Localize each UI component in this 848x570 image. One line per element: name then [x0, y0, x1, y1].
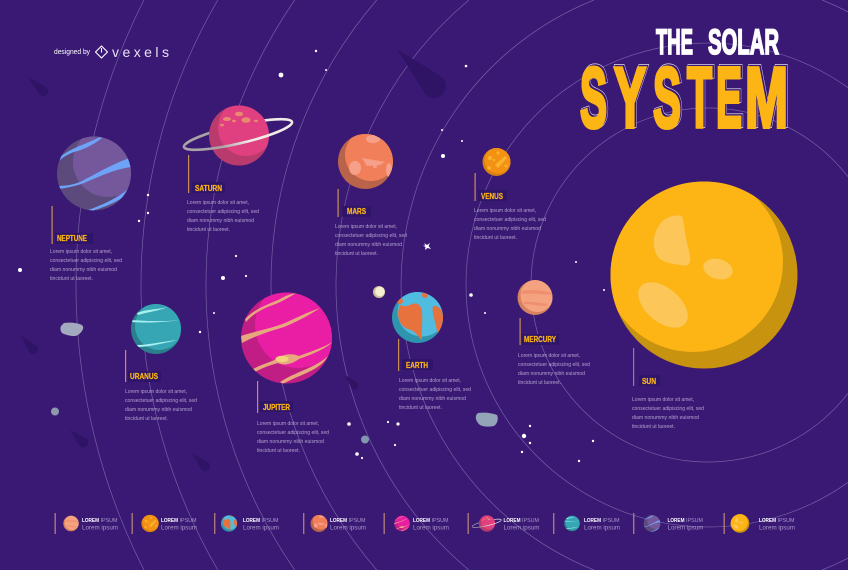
title: M — [746, 50, 790, 144]
planet: uranus — [131, 302, 183, 354]
sun text: Lorem ipsum dolor sit amet, — [632, 397, 694, 403]
legend item: venus: Lorem ipsum — [161, 524, 197, 532]
legend item: earth — [214, 513, 279, 534]
mercury text: consectetuer adipiscing elit, sed — [518, 362, 590, 368]
mars label — [338, 189, 371, 217]
uranus text: consectetuer adipiscing elit, sed — [125, 398, 197, 404]
mars text: diam nonummy nibh euismod — [335, 242, 402, 248]
saturn text: diam nonummy nibh euismod — [187, 218, 254, 224]
title: S — [582, 50, 608, 144]
uranus label — [125, 350, 161, 382]
logo: designed by vexels — [54, 44, 169, 60]
legend item: sun: IPSUM — [778, 518, 795, 524]
jupiter label — [257, 381, 293, 413]
venus text: consectetuer adipiscing elit, sed — [474, 217, 546, 223]
neptune label — [52, 206, 93, 244]
logo: designed by vexels: designed by — [54, 49, 90, 56]
title: M — [746, 50, 790, 144]
moon — [373, 286, 385, 298]
title: S — [582, 50, 608, 144]
jupiter text: diam nonummy nibh euismod — [257, 439, 324, 445]
planet: sun — [603, 172, 798, 368]
neptune text: consectetuer adipiscing elit, sed — [50, 258, 122, 264]
legend item: earth: IPSUM — [262, 518, 279, 524]
comets — [21, 49, 446, 471]
title: THE — [656, 23, 693, 62]
title: Y — [616, 50, 648, 144]
neptune text: diam nonummy nibh euismod — [50, 267, 117, 273]
legend item: mars: IPSUM — [348, 518, 366, 524]
legend item: mercury — [54, 513, 118, 534]
legend item: uranus: LOREM — [584, 518, 601, 524]
legend item: jupiter: Lorem ipsum — [413, 524, 449, 532]
legend item: earth: Lorem ipsum — [243, 524, 279, 532]
mars text: Lorem ipsum dolor sit amet, — [335, 224, 397, 230]
legend item: mercury: IPSUM — [100, 518, 118, 524]
uranus text: diam nonummy nibh euismod — [125, 407, 192, 413]
planet: mars — [338, 129, 397, 189]
planet: earth — [392, 288, 446, 343]
jupiter text: tincidunt ut laoreet. — [257, 448, 300, 454]
earth text: tincidunt ut laoreet. — [399, 405, 442, 411]
neptune label: NEPTUNE — [57, 234, 88, 243]
sun text: consectetuer adipiscing elit, sed — [632, 406, 704, 412]
title: S — [654, 50, 682, 144]
sun label — [633, 348, 660, 386]
legend item: venus: LOREM — [161, 518, 178, 524]
legend item: jupiter — [384, 513, 449, 534]
legend item: neptune: LOREM — [668, 518, 685, 524]
jupiter text — [257, 421, 329, 454]
legend item: saturn — [468, 513, 540, 534]
legend item: neptune: IPSUM — [686, 518, 703, 524]
mercury text: tincidunt ut laoreet. — [518, 380, 561, 386]
title: T — [688, 50, 714, 144]
earth text — [399, 378, 471, 411]
neptune text — [50, 249, 122, 282]
title: Y — [616, 50, 648, 144]
legend item: sun: Lorem ipsum — [759, 524, 795, 532]
uranus label: URANUS — [130, 372, 159, 381]
legend item: neptune: Lorem ipsum — [668, 524, 704, 532]
legend item: sun: LOREM — [759, 518, 776, 524]
uranus text — [125, 389, 197, 422]
venus text: tincidunt ut laoreet. — [474, 235, 517, 241]
venus label: VENUS — [481, 192, 504, 201]
jupiter label: JUPITER — [263, 403, 290, 412]
legend item: saturn: Lorem ipsum — [504, 524, 540, 532]
saturn label — [188, 155, 225, 193]
venus text: diam nonummy nibh euismod — [474, 226, 541, 232]
legend item: mercury: LOREM — [82, 518, 99, 524]
venus text: Lorem ipsum dolor sit amet, — [474, 208, 536, 214]
mars text: consectetuer adipiscing elit, sed — [335, 233, 407, 239]
earth text: Lorem ipsum dolor sit amet, — [399, 378, 461, 384]
planet: mercury — [518, 279, 554, 315]
title: Y — [614, 51, 646, 146]
planet: saturn — [184, 100, 292, 166]
title: E — [718, 50, 744, 144]
mercury label — [520, 318, 559, 345]
legend item: uranus: IPSUM — [602, 518, 620, 524]
neptune text: Lorem ipsum dolor sit amet, — [50, 249, 112, 255]
sun text: tincidunt ut laoreet. — [632, 424, 675, 430]
saturn text: Lorem ipsum dolor sit amet, — [187, 200, 249, 206]
jupiter text: Lorem ipsum dolor sit amet, — [257, 421, 319, 427]
legend item: uranus: Lorem ipsum — [584, 524, 620, 532]
sun text: diam nonummy nibh euismod — [632, 415, 699, 421]
legend item: sun — [724, 513, 795, 534]
legend item: mars: Lorem ipsum — [330, 524, 366, 532]
legend: bottom row — [54, 513, 795, 534]
earth text: diam nonummy nibh euismod — [399, 396, 466, 402]
legend item: mercury: Lorem ipsum — [82, 524, 118, 532]
saturn text — [187, 200, 259, 233]
mars label: MARS — [347, 207, 367, 216]
planet: venus — [482, 146, 512, 176]
earth label — [398, 339, 433, 371]
planet: neptune — [57, 127, 143, 211]
saturn text: consectetuer adipiscing elit, sed — [187, 209, 259, 215]
planet: jupiter — [241, 282, 341, 384]
sun text — [632, 397, 704, 430]
saturn label: SATURN — [195, 184, 222, 193]
title: T — [688, 50, 714, 144]
neptune text: tincidunt ut laoreet. — [50, 276, 93, 282]
mercury text: diam nonummy nibh euismod — [518, 371, 585, 377]
mercury text: Lorem ipsum dolor sit amet, — [518, 353, 580, 359]
legend item: saturn: IPSUM — [522, 518, 539, 524]
uranus text: Lorem ipsum dolor sit amet, — [125, 389, 187, 395]
earth label: EARTH — [406, 361, 428, 370]
legend item: saturn: LOREM — [504, 518, 521, 524]
mars text — [335, 224, 407, 257]
earth text: consectetuer adipiscing elit, sed — [399, 387, 471, 393]
legend item: neptune — [633, 513, 704, 534]
legend item: venus: IPSUM — [180, 518, 197, 524]
legend item: jupiter: LOREM — [413, 518, 430, 524]
jupiter text: consectetuer adipiscing elit, sed — [257, 430, 329, 436]
title: E — [716, 51, 742, 146]
mercury text — [518, 353, 590, 386]
logo: designed by vexels: vexels — [112, 44, 169, 60]
legend item: mars — [303, 513, 366, 534]
mercury label: MERCURY — [524, 335, 557, 344]
asteroids — [51, 323, 498, 444]
title: T — [687, 51, 712, 146]
saturn text: tincidunt ut laoreet. — [187, 227, 230, 233]
title: SOLAR — [708, 23, 779, 62]
title: M — [745, 51, 788, 146]
legend item: venus — [132, 513, 197, 534]
legend item: uranus — [553, 513, 620, 534]
title: S — [654, 50, 682, 144]
title: E — [718, 50, 744, 144]
stars — [18, 50, 605, 462]
title: S — [580, 51, 607, 146]
legend item: mars: LOREM — [330, 518, 347, 524]
venus text — [474, 208, 546, 241]
legend item: jupiter: IPSUM — [432, 518, 449, 524]
sun label: SUN — [642, 377, 656, 386]
uranus text: tincidunt ut laoreet. — [125, 416, 168, 422]
legend item: earth: LOREM — [243, 518, 260, 524]
title: S — [653, 51, 681, 146]
title — [580, 23, 790, 146]
mars text: tincidunt ut laoreet. — [335, 251, 378, 257]
venus label — [474, 173, 507, 201]
